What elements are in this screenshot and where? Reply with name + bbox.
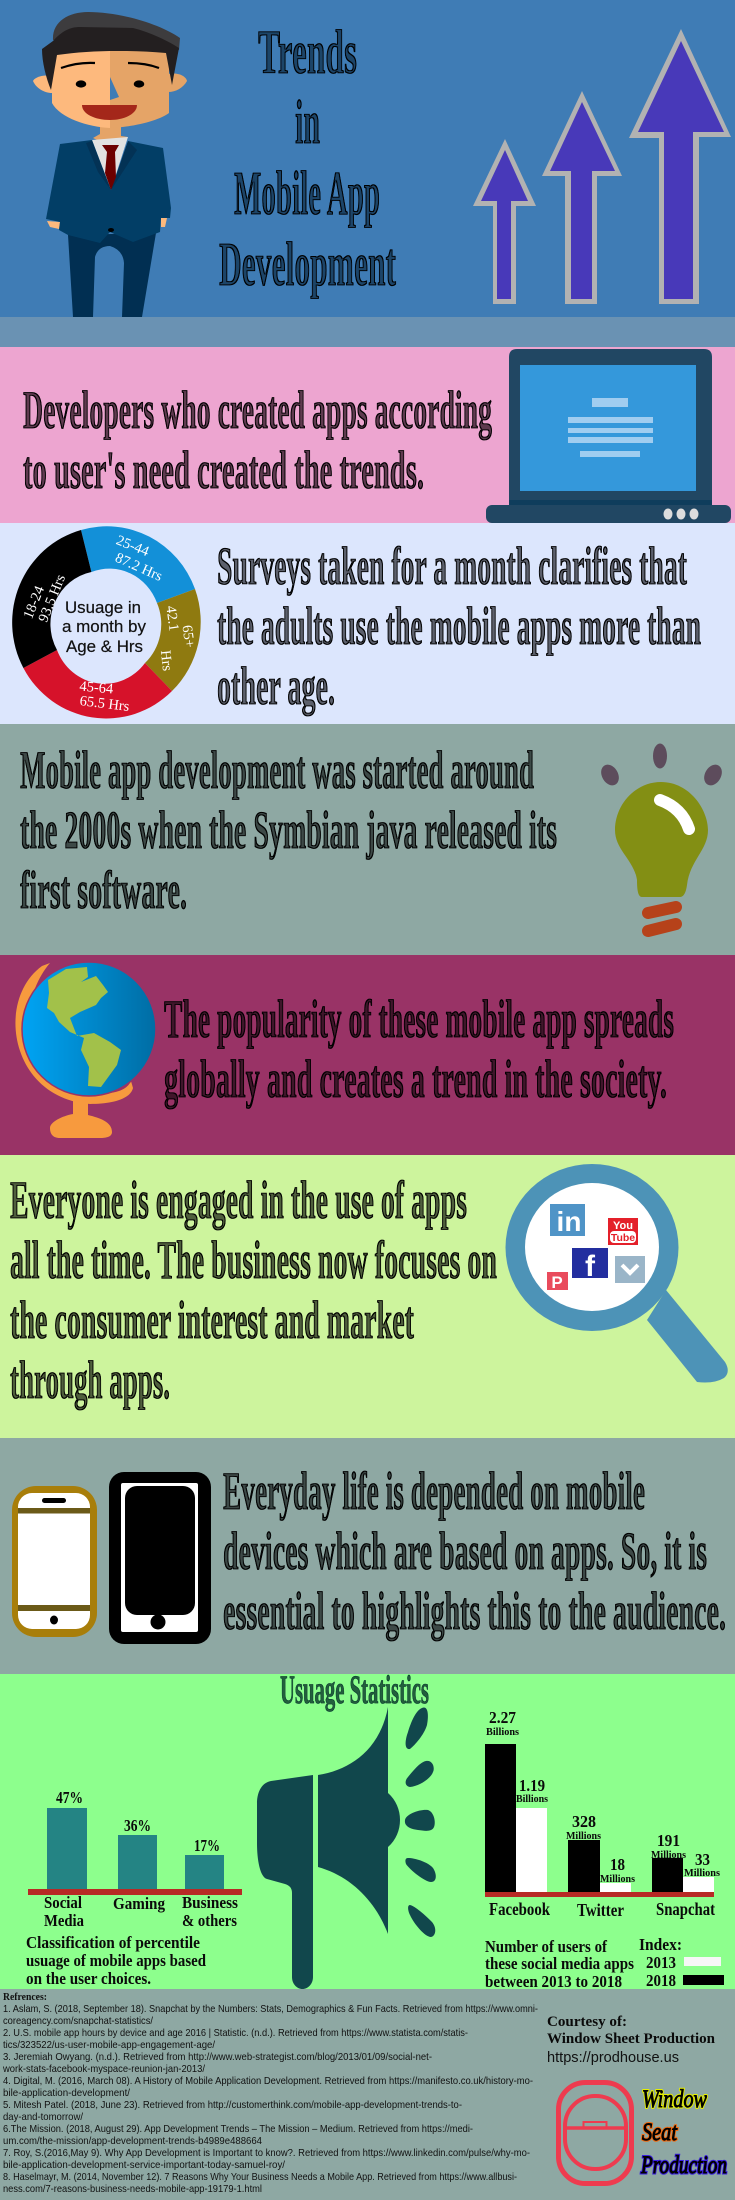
bar chart: social media users: Snapchat	[656, 1899, 715, 1919]
icon: magnifying glass with social icons	[506, 1164, 728, 1382]
text block: references	[2, 1992, 538, 2195]
icon: gold phone	[12, 1486, 97, 1637]
text block: references: 3. Jeremiah Owyang. (n.d.). Retrieved from http://www.web-strategist.com/blog/2013/01/09/social-net-	[3, 2052, 432, 2063]
panel: title header: in	[295, 89, 320, 157]
bar chart: app usage percentile: Business	[182, 1893, 238, 1912]
bar chart: app usage percentile: 17%	[194, 1836, 220, 1855]
panel: surveys	[0, 523, 735, 724]
bar chart: app usage percentile: & others	[182, 1911, 237, 1930]
text block: courtesy: Courtesy of:	[547, 2014, 627, 2030]
text block: references: Refrences:	[3, 1992, 47, 2003]
bar chart: social media users: 1.19	[519, 1776, 545, 1795]
bar chart: app usage percentile: 36%	[124, 1816, 151, 1835]
panel: business focus: through apps.	[10, 1350, 170, 1410]
donut chart: usage by age: 18-24	[21, 583, 48, 621]
donut chart: usage by age: 65.5 Hrs	[79, 693, 131, 715]
text block: references: 2. U.S. mobile app hours by device and age 2016 | Statistic. (n.d.). Retrieved from https://www.statista.com/statis-	[3, 2028, 468, 2039]
text block: references: 8. Haselmayr, M. (2014, November 12). 7 Reasons Why Your Business Needs a Mobile App. Retrieved from https://www.allbusi-	[3, 2172, 517, 2183]
panel: references and credits	[0, 1989, 735, 2200]
panel: title header	[0, 0, 735, 347]
donut chart: usage by age	[12, 526, 201, 718]
bar chart: social media users: 191	[657, 1831, 680, 1850]
logo: window seat production	[558, 2082, 727, 2184]
panel: title header: Mobile App	[234, 160, 380, 228]
bar chart: social media users: Millions	[684, 1867, 721, 1879]
text block: references: 4. Digital, M. (2016, March 08). A History of Mobile Application Development. Retrieved from https://manifesto.co.uk/history-mo-	[3, 2076, 533, 2087]
caption: percentile chart	[26, 1933, 206, 1988]
text: history line 3: first software.	[20, 860, 187, 920]
icon: magnifying glass with social icons: f	[585, 1250, 596, 1283]
text block: references: 1. Aslam, S. (2018, September 18). Snapchat by the Numbers: Stats, Demographics & Fun Facts. Retrieved from https://www.omni-	[3, 2004, 538, 2015]
text block: references: 7. Roy, S.(2016,May 9). Why App Development is Important to know?. Retrieved from https://www.linkedin.com/pulse/why-mo-	[3, 2148, 530, 2159]
icon: laptop	[486, 349, 731, 523]
logo: window seat production: Seat	[642, 2119, 678, 2146]
text block: courtesy: https://prodhouse.us	[547, 2050, 679, 2066]
caption: social media users: these social media apps	[485, 1954, 634, 1973]
panel: everyday devices	[0, 1438, 735, 1674]
caption: percentile chart: usuage of mobile apps based	[26, 1951, 206, 1970]
bar chart: app usage percentile: 47%	[56, 1788, 83, 1807]
icon: black phone	[109, 1472, 211, 1644]
caption: social media users: Number of users of	[485, 1937, 607, 1956]
text block: references: day-and-tomorrow/	[3, 2112, 83, 2123]
text block: courtesy: Window Sheet Production	[547, 2031, 715, 2047]
donut chart: usage by age: Hrs	[157, 649, 175, 672]
legend: index	[639, 1935, 724, 1990]
bar chart: social media users: Millions	[651, 1849, 687, 1861]
text block: references: bile-application-development-service-important-today-samuel-roy/	[3, 2160, 285, 2171]
bar chart: social media users: Millions	[566, 1830, 602, 1842]
heading: usage statistics: Usuage Statistics	[280, 1667, 429, 1712]
icon: light bulb	[598, 744, 725, 931]
bar chart: social media users	[485, 1708, 721, 1920]
text: surveys line 3: other age.	[217, 656, 335, 716]
logo: window seat production: Window	[642, 2086, 707, 2113]
bar chart: app usage percentile: Gaming	[113, 1894, 165, 1913]
icon: magnifying glass with social icons: Tube	[611, 1232, 635, 1244]
heading: Development: Development	[219, 231, 396, 299]
panel: usage statistics	[0, 1667, 735, 1991]
donut chart: usage by age: 25-44	[114, 533, 152, 560]
icon: large rising arrow	[629, 29, 731, 304]
text block: references: coreagency.com/snapchat-statistics/	[3, 2016, 153, 2027]
bar chart: social media users: Billions	[486, 1726, 520, 1738]
text block: references: tics/323522/us-user-mobile-app-engagement-age/	[3, 2040, 215, 2051]
donut chart: usage by age: 87.2 Hrs	[113, 550, 165, 585]
caption: percentile chart: on the user choices.	[26, 1969, 151, 1988]
heading: Trends: Trends	[258, 19, 357, 87]
donut chart: usage by age: 45-64	[79, 679, 115, 698]
text block: references: ness.com/7-reasons-business-needs-mobile-app-19179-1.html	[3, 2184, 262, 2195]
legend: index: 2013	[646, 1953, 676, 1972]
panel: business focus	[0, 1155, 735, 1438]
panel: developers	[0, 347, 735, 523]
caption: social media users: between 2013 to 2018	[485, 1972, 622, 1991]
logo: window seat production: Window	[642, 2086, 707, 2113]
icon: magnifying glass with social icons: in	[557, 1206, 581, 1237]
bar chart: app usage percentile: Media	[44, 1911, 84, 1930]
donut chart: usage by age: Usuage in	[65, 599, 141, 617]
panel: history	[0, 724, 735, 955]
icon: megaphone	[257, 1707, 436, 1989]
text block: references: 5. Mitesh Patel. (2018, June 23). Retrieved from http://customerthink.com/mobile-app-development-trends-to-	[3, 2100, 462, 2111]
bar chart: social media users: 18	[610, 1855, 625, 1874]
bar chart: app usage percentile: Social	[44, 1893, 82, 1912]
bar chart: app usage percentile	[28, 1788, 242, 1930]
donut chart: usage by age: 42.1	[162, 605, 182, 632]
text block: references: 6.The Mission. (2018, August 29). App Development Trends – The Mission – Medium. Retrieved from https://medi-	[3, 2124, 473, 2135]
icon: magnifying glass with social icons: P	[551, 1273, 563, 1292]
icon: businessman	[33, 12, 187, 317]
panel: global popularity	[0, 955, 735, 1155]
bar chart: social media users: Facebook	[489, 1899, 550, 1919]
legend: index: 2018	[646, 1971, 676, 1990]
legend: index: Index:	[639, 1935, 682, 1954]
bar chart: social media users: 33	[695, 1850, 710, 1869]
logo: window seat production: Seat	[642, 2119, 678, 2146]
bar chart: social media users: Billions	[516, 1793, 549, 1805]
caption: social media users	[485, 1937, 634, 1991]
caption: percentile chart: Classification of percentile	[26, 1933, 200, 1952]
bar chart: social media users: 328	[572, 1812, 596, 1831]
text block: references: bile-application-development/	[3, 2088, 130, 2099]
icon: medium rising arrow	[542, 91, 622, 304]
bar chart: social media users: Twitter	[577, 1900, 624, 1920]
donut chart: usage by age: Age & Hrs	[66, 638, 143, 656]
icon: small rising arrow	[473, 139, 536, 304]
bar chart: social media users: Millions	[600, 1873, 636, 1885]
bar chart: social media users: 2.27	[489, 1708, 516, 1727]
text block: references: um.com/the-mission/app-development-trends-b4989e488664	[3, 2136, 262, 2147]
icon: magnifying glass with social icons: You	[613, 1220, 633, 1232]
text block: courtesy	[547, 2014, 715, 2066]
donut chart: usage by age: 93.5 Hrs	[36, 572, 69, 625]
icon: globe	[15, 962, 156, 1138]
donut chart: usage by age: a month by	[62, 618, 147, 636]
donut chart: usage by age: 65+	[178, 624, 197, 649]
text block: references: work-stats-facebook-myspace-reunion-jan-2013/	[2, 2064, 205, 2075]
